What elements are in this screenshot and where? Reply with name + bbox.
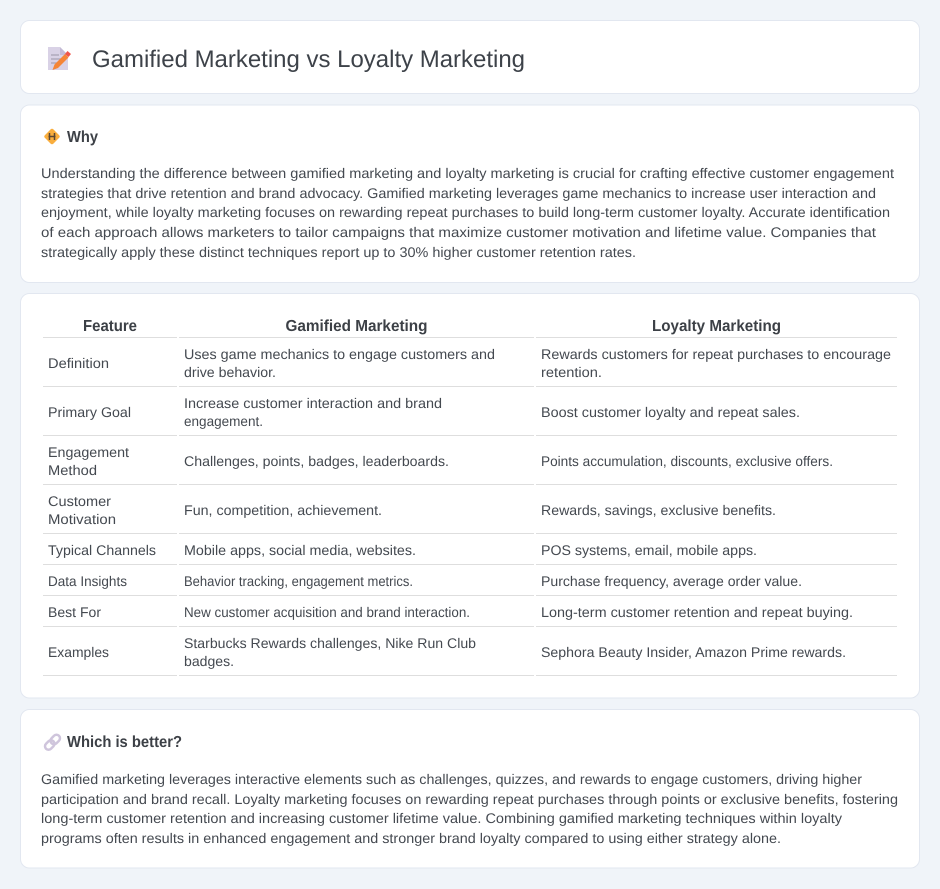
text block: why paragraph: Understanding the difference between gamified marketing and loyalty marketing is crucial for crafting effective customer engagement	[41, 165, 894, 181]
row: engagement method: Engagement	[48, 444, 129, 460]
text block: verdict paragraph	[41, 771, 898, 846]
row: definition: drive behavior.	[184, 364, 276, 380]
row: customer motivation: Motivation	[48, 511, 116, 527]
row: best for: New customer acquisition and brand interaction.	[184, 604, 470, 620]
text block: verdict paragraph: Gamified marketing leverages interactive elements such as challenges, quizzes, and rewards to engage customers, driving higher	[41, 771, 862, 787]
row: data insights	[48, 573, 802, 589]
row: definition	[48, 346, 891, 380]
heading: why: Why	[67, 129, 98, 146]
panel: comparison table	[20, 294, 920, 698]
panel: which is better	[20, 710, 920, 868]
row: best for	[48, 604, 853, 620]
row: best for: Long-term customer retention and repeat buying.	[541, 604, 853, 620]
row: primary goal: engagement.	[184, 413, 263, 429]
row: typical channels: Mobile apps, social media, websites.	[184, 542, 416, 558]
title: Gamified Marketing vs Loyalty Marketing	[92, 46, 525, 73]
text block: why paragraph: of each approach allows marketers to tailor campaigns that maximize customer motivation and lifetime value. Companies that	[41, 224, 876, 240]
panel: why	[20, 105, 920, 282]
row: typical channels: Typical Channels	[48, 542, 156, 558]
row: primary goal	[48, 395, 800, 429]
row: data insights: Data Insights	[48, 573, 127, 589]
row: engagement method: Points accumulation, discounts, exclusive offers.	[541, 453, 833, 469]
text block: why paragraph	[41, 165, 894, 260]
text block: why paragraph: strategies that drive retention and brand advocacy. Gamified marketing leverages game mechanics to increase user interaction and	[41, 185, 876, 201]
row: examples: Starbucks Rewards challenges, Nike Run Club	[184, 635, 476, 651]
icon: document with pencil	[48, 47, 71, 70]
row: engagement method: Challenges, points, badges, leaderboards.	[184, 453, 449, 469]
table header	[83, 318, 781, 335]
row: definition: retention.	[541, 364, 602, 380]
table header: Gamified Marketing	[286, 318, 428, 335]
row: customer motivation: Customer	[48, 493, 111, 509]
row: customer motivation: Fun, competition, achievement.	[184, 502, 382, 518]
row: typical channels: POS systems, email, mobile apps.	[541, 542, 757, 558]
row: typical channels	[48, 542, 757, 558]
heading: which is better: Which is better?	[67, 734, 182, 751]
icon: orange diamond sign	[44, 128, 60, 145]
row: examples: Sephora Beauty Insider, Amazon Prime rewards.	[541, 644, 846, 660]
text block: why paragraph: enjoyment, while loyalty marketing focuses on rewarding repeat purchases to build long-term customer loyalty. Accurate identification	[41, 204, 890, 220]
row: examples: badges.	[184, 653, 234, 669]
row: primary goal: Boost customer loyalty and repeat sales.	[541, 404, 800, 420]
row: best for: Best For	[48, 604, 101, 620]
row: examples	[48, 635, 846, 669]
row: engagement method	[48, 444, 833, 478]
text block: verdict paragraph: long-term customer retention and increasing customer lifetime value. Combining gamified marketing techniques within loyalty	[41, 810, 842, 826]
panel: header	[20, 20, 920, 94]
row: data insights: Behavior tracking, engagement metrics.	[184, 573, 413, 589]
text block: verdict paragraph: participation and brand recall. Loyalty marketing focuses on rewarding repeat purchases through points or exclusive benefits, fostering	[41, 791, 898, 807]
row: primary goal: Primary Goal	[48, 404, 131, 420]
icon: link	[44, 733, 61, 751]
row: definition: Rewards customers for repeat purchases to encourage	[541, 346, 891, 362]
table header: Feature	[83, 318, 137, 335]
row: definition: Uses game mechanics to engage customers and	[184, 346, 495, 362]
text block: verdict paragraph: programs often results in enhanced engagement and stronger brand loyalty compared to using either strategy alone.	[41, 830, 781, 846]
table header: Loyalty Marketing	[652, 318, 781, 335]
row: data insights: Purchase frequency, average order value.	[541, 573, 802, 589]
row: examples: Examples	[48, 644, 109, 660]
row: customer motivation: Rewards, savings, exclusive benefits.	[541, 502, 776, 518]
row: primary goal: Increase customer interaction and brand	[184, 395, 442, 411]
text block: why paragraph: strategically apply these distinct techniques report up to 30% higher customer retention rates.	[41, 244, 636, 260]
row: engagement method: Method	[48, 462, 97, 478]
row: customer motivation	[48, 493, 776, 527]
row: definition: Definition	[48, 355, 109, 371]
